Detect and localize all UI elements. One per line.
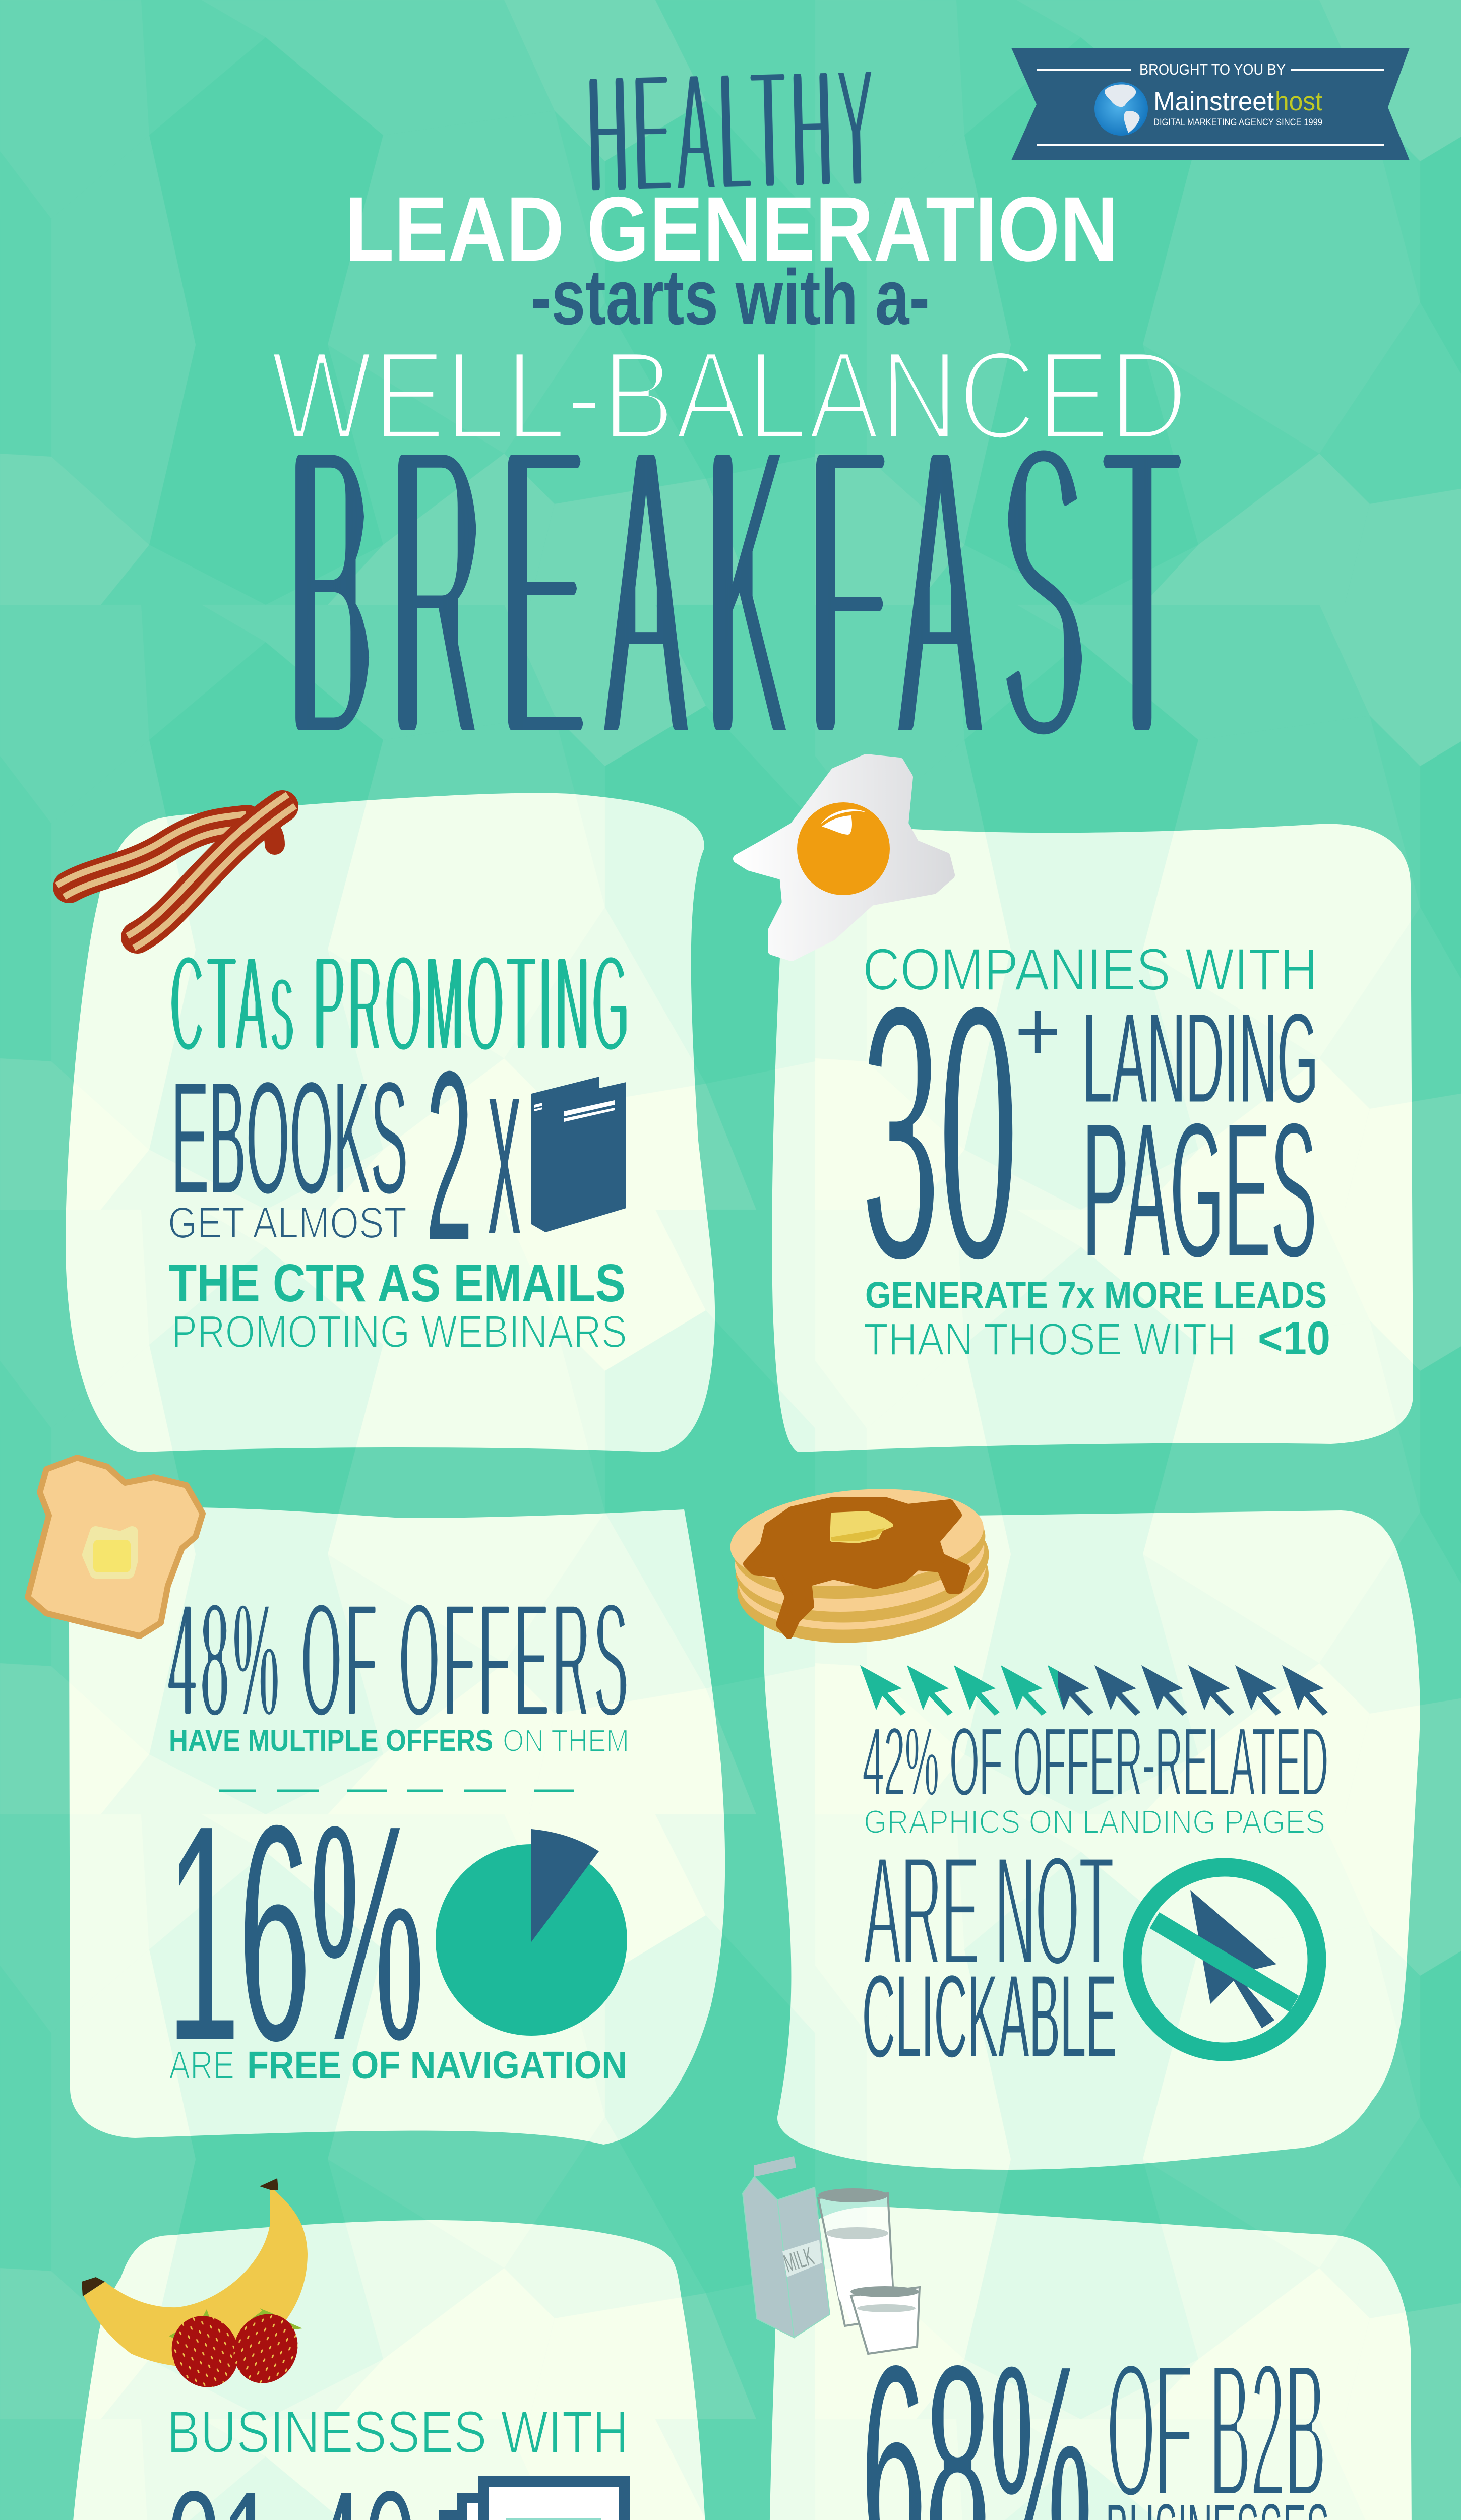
panel: clickable graphics: [726, 1479, 1420, 2170]
icon: milk carton and glasses: MILK: [780, 2242, 817, 2278]
stat: 30+: [862, 926, 1061, 1339]
icon: milk carton and glasses: [743, 2156, 920, 2354]
title: starts with a: -starts with a-: [531, 254, 930, 341]
text: promoting webinars: PROMOTING WEBINARS: [171, 1307, 627, 1357]
panel 3 shape: [69, 1507, 725, 2145]
brand name: host: [1275, 87, 1322, 116]
panel 6 shape: [769, 2207, 1413, 2520]
panel: landing pages: 30: [862, 926, 1017, 1339]
icon: no click sign: [1132, 1867, 1317, 2052]
chart: pie: [436, 1829, 627, 2036]
icon: bacon: [60, 800, 291, 942]
ribbon heading: BROUGHT TO YOU BY: [1139, 60, 1286, 78]
panel 5 shape: [68, 2220, 711, 2520]
brand tagline: DIGITAL MARKETING AGENCY SINCE 1999: [1153, 117, 1322, 128]
panel: offers and navigation: 16%: [168, 1757, 424, 2108]
title: lead generation: LEAD GENERATION: [345, 177, 1118, 280]
text: free of navigation: FREE OF NAVIGATION: [247, 2044, 627, 2087]
icon: toast with butter: [28, 1458, 203, 1636]
brand name: Mainstreet: [1153, 87, 1274, 116]
sponsor ribbon: [1011, 48, 1410, 160]
panel 1 shape: [66, 793, 715, 1452]
text: than those with: THAN THOSE WITH: [864, 1314, 1236, 1365]
icon: globe: [1094, 82, 1148, 136]
icon: pancakes: [726, 1479, 996, 1653]
panel: ebooks CTAs: EBOOKS: [171, 1047, 408, 1228]
panel: ebooks CTAs: [60, 793, 715, 1452]
text: graphics on landing pages: GRAPHICS ON LANDING PAGES: [864, 1803, 1325, 1840]
icon: book: [531, 1077, 626, 1232]
stat: 2x: [427, 1003, 521, 1292]
panel: ebooks CTAs: x: [488, 1003, 521, 1288]
text: companies with: COMPANIES WITH: [863, 936, 1318, 1003]
ribbon shape: [1011, 48, 1410, 160]
text: less than 10: <10: [1258, 1312, 1330, 1364]
title: well-balanced: WELL-BALANCED: [270, 325, 1188, 466]
text: the ctr as emails: THE CTR AS EMAILS: [169, 1253, 626, 1313]
panel: b2b businesses: [743, 2156, 1413, 2520]
text: businesses with: BUSINESSES WITH: [167, 2399, 629, 2466]
text: get almost: GET ALMOST: [168, 1199, 407, 1247]
icon: banana and strawberries: [82, 2178, 309, 2399]
icon: row of ten cursors: [860, 1665, 1328, 1716]
text: are: ARE: [169, 2043, 234, 2088]
icon: fried egg: [738, 759, 950, 957]
panel: offers and navigation: [28, 1458, 725, 2145]
text: on them: ON THEM: [503, 1724, 629, 1758]
text: have multiple offers: HAVE MULTIPLE OFFERS: [169, 1724, 493, 1757]
text: generate 7x more leads: GENERATE 7x MORE LEADS: [865, 1274, 1327, 1316]
title block: [270, 30, 1199, 831]
panel 4 shape: [764, 1510, 1420, 2170]
panel 2 shape: [772, 822, 1413, 1452]
icon: stacked pages: [444, 2482, 624, 2520]
stat: 2x: 2: [427, 1019, 472, 1292]
panel: landing pages: [738, 759, 1413, 1452]
stat: 30+: +: [1015, 983, 1061, 1079]
panel: businesses with 31-40: [68, 2178, 711, 2520]
